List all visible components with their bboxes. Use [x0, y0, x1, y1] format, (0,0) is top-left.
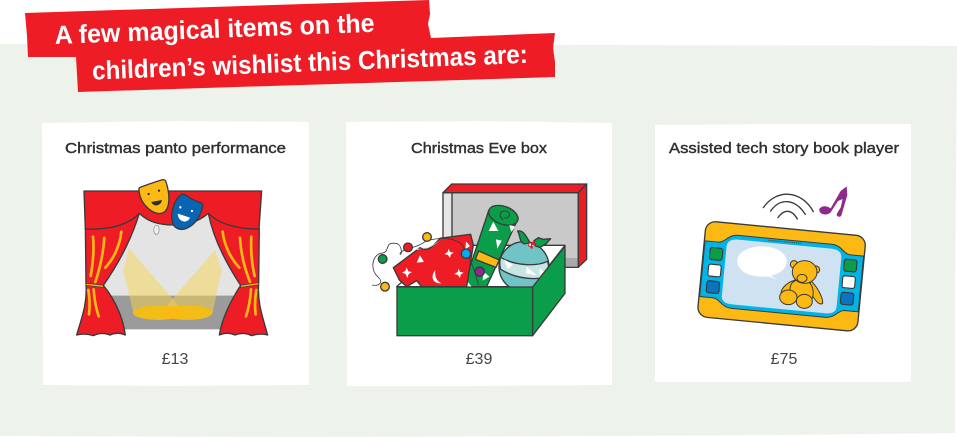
right buttons [840, 259, 857, 305]
panel: Christmas Eve box [346, 121, 612, 386]
title: A few magical items on the [54, 8, 375, 50]
panel: Assisted tech story book player [655, 124, 911, 382]
red torn banner [25, 0, 555, 92]
teddy bear [780, 261, 823, 308]
speaker dots [768, 240, 802, 243]
music note [819, 186, 847, 217]
icon: blue comedy mask [172, 194, 203, 229]
screen [721, 239, 842, 314]
price: panto: £13 [162, 351, 188, 368]
box lid [443, 184, 587, 267]
box front [397, 287, 533, 336]
heading: panto: Christmas panto performance [65, 140, 286, 157]
icon: yellow comedy mask [139, 180, 169, 214]
left buttons [706, 247, 723, 294]
device body [697, 221, 866, 332]
icon: theatre stage with masks [77, 180, 268, 336]
box interior [397, 245, 565, 287]
icon: story book player tablet [697, 186, 866, 332]
jumper [393, 234, 473, 287]
left curtain [77, 213, 139, 336]
string of lights [372, 233, 484, 291]
sound waves [763, 194, 813, 219]
right curtain [208, 213, 268, 336]
panel: Christmas panto performance [42, 121, 309, 386]
heading: player: Assisted tech story book player [669, 140, 899, 157]
price: box: £39 [466, 351, 492, 368]
price: player: £75 [771, 351, 797, 368]
wrapping paper roll [463, 202, 521, 287]
title: children’s wishlist this Christmas are: [91, 39, 528, 86]
speech bubble [737, 246, 787, 280]
icon: gift box with presents [372, 184, 587, 336]
heading: box: Christmas Eve box [411, 140, 548, 157]
title [54, 2, 528, 87]
pelmet [84, 191, 262, 229]
box side [533, 246, 565, 336]
bauble [499, 231, 551, 292]
